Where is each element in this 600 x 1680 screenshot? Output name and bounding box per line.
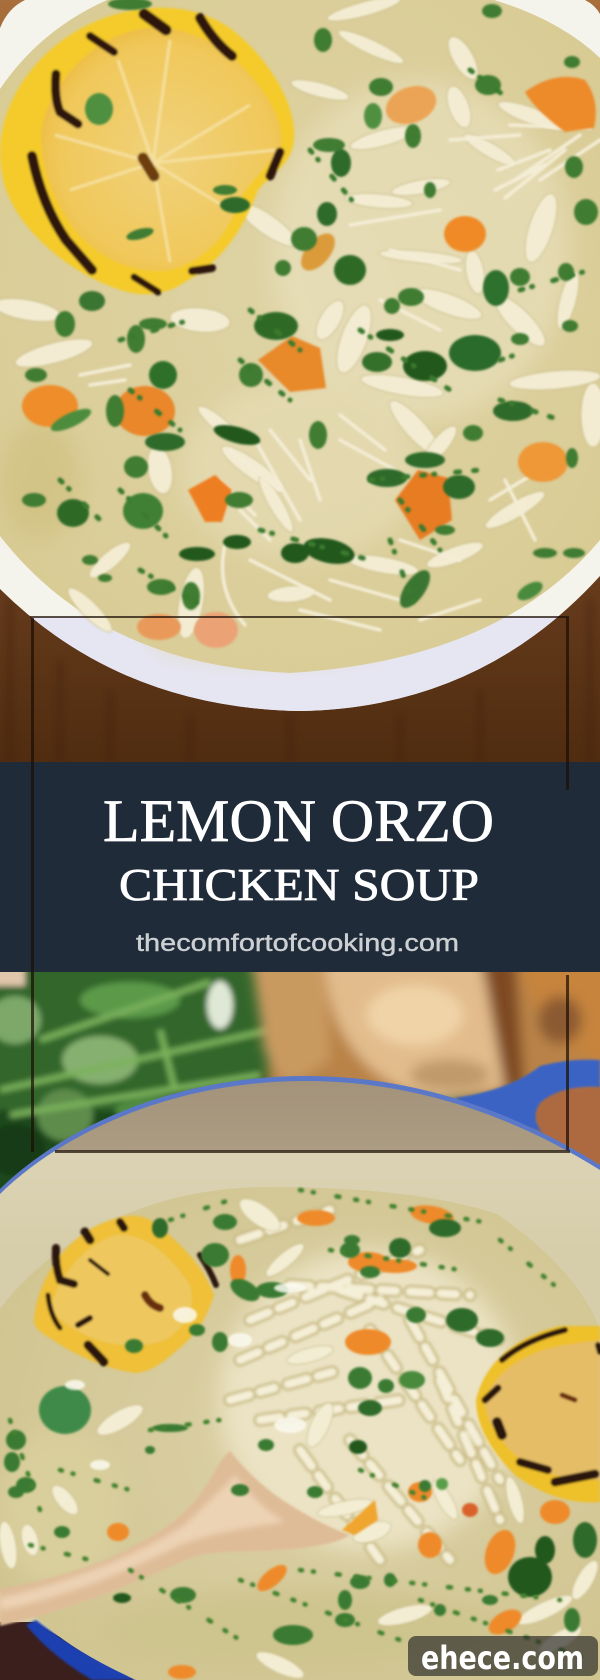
bottom photo: pot of soup with parsley and rolls bbox=[0, 950, 600, 1680]
dense orzo rows bbox=[230, 1210, 500, 1560]
title line 1: LEMON ORZO bbox=[103, 788, 494, 854]
grilled lemon half bbox=[0, 8, 294, 294]
soup broth in pot bbox=[0, 1187, 600, 1680]
pot inner wall bbox=[0, 1081, 600, 1680]
grilled lemon left bbox=[34, 1216, 216, 1373]
wood grain streaks bbox=[10, 600, 590, 762]
top photo: bowl of soup on wooden table bbox=[0, 0, 600, 762]
banner bbox=[0, 762, 600, 972]
fresh parsley bunch bbox=[0, 950, 300, 1210]
pale glow patches in broth bbox=[0, 80, 570, 660]
lemon flesh bbox=[41, 28, 281, 271]
bowl white rim bbox=[0, 0, 600, 711]
parsley in pot bbox=[4, 1214, 597, 1645]
lemon segments bbox=[55, 40, 275, 262]
pale pasta mass bbox=[0, 1250, 520, 1670]
orzo pasta bbox=[0, 0, 600, 641]
soup broth bbox=[0, 0, 600, 673]
grilled lemon right bbox=[476, 1326, 600, 1502]
frame overlay lines bbox=[30, 616, 570, 1153]
watermark plate bbox=[408, 1636, 598, 1676]
parsley speckles in pot bbox=[10, 1190, 590, 1660]
banner background bbox=[0, 762, 600, 972]
char marks bbox=[32, 14, 280, 292]
watermark bbox=[408, 1636, 598, 1677]
wooden spoon bbox=[0, 1451, 350, 1626]
orzo pasta in pot bbox=[0, 1193, 600, 1680]
dinner rolls bbox=[250, 950, 600, 1102]
website url: thecomfortofcooking.com bbox=[136, 930, 459, 957]
carrot pieces in pot bbox=[107, 1202, 570, 1679]
lower rim shade bbox=[31, 617, 558, 711]
parsley speckles bbox=[60, 70, 590, 620]
title line 2: CHICKEN SOUP bbox=[119, 859, 479, 910]
pot handle blue bbox=[455, 1060, 600, 1132]
backdrop bbox=[0, 950, 600, 1680]
pot outer blue bottom bbox=[26, 1620, 146, 1680]
pot blue rim bbox=[0, 1076, 600, 1680]
roll seen through handle bbox=[530, 1085, 600, 1190]
wooden table bbox=[0, 0, 600, 762]
dark table corner bbox=[0, 1622, 134, 1680]
dense orzo shadow rows bbox=[230, 1210, 500, 1560]
spoon highlight bbox=[0, 1475, 285, 1610]
parsley flakes bbox=[22, 0, 598, 613]
lemon rind bbox=[0, 8, 294, 294]
carrot pieces bbox=[22, 77, 596, 648]
white glints on broth bbox=[65, 1283, 306, 1470]
shredded chicken bbox=[80, 125, 600, 630]
